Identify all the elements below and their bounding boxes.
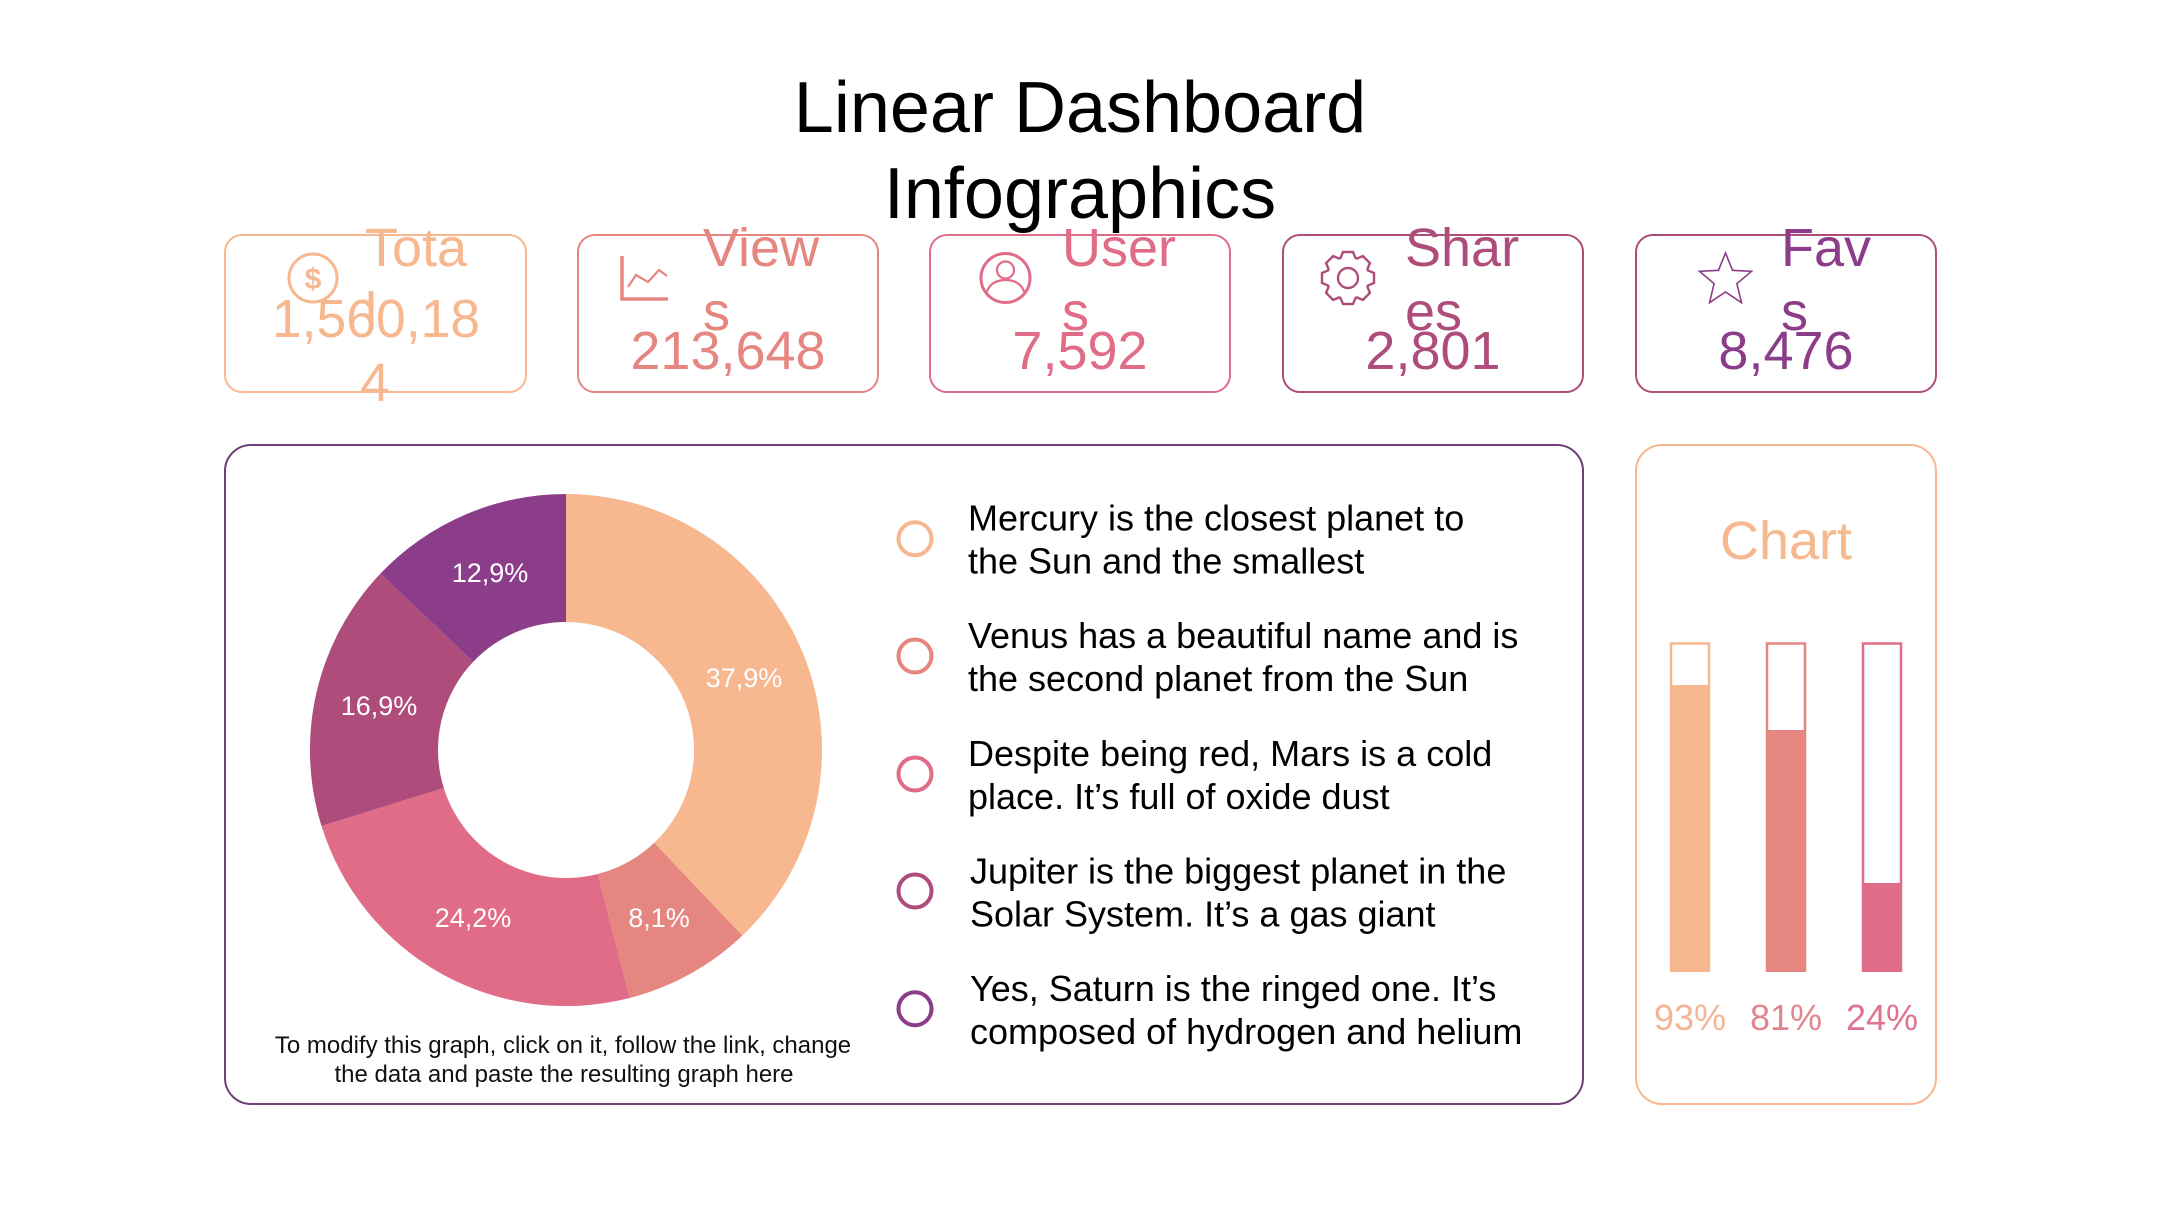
donut value labels: 37,9% <box>706 663 782 693</box>
bar: 93% <box>1654 644 1726 1038</box>
card label: views: s <box>703 282 730 342</box>
legend item: Mars: place. It’s full of oxide dust <box>968 776 1390 817</box>
card label: favs: s <box>1781 282 1808 342</box>
card value: favs: 8,476 <box>1718 321 1854 381</box>
legend item: Mercury: the Sun and the smallest <box>968 540 1364 582</box>
bar: 81% <box>1750 644 1822 1038</box>
card label: views <box>703 218 820 342</box>
panel: favs card <box>1636 218 1936 392</box>
panel: main donut and legend <box>225 445 1583 1104</box>
donut chart <box>310 494 822 1006</box>
panel: views card <box>578 218 878 392</box>
donut caption: To modify this graph, click on it, follow the link, change <box>275 1032 851 1059</box>
icon: dollar coin: $ <box>305 263 322 296</box>
legend item: Jupiter: Jupiter is the biggest planet in the <box>970 850 1506 892</box>
bar: 24% <box>1846 644 1918 1038</box>
legend item: Mercury: Mercury is the closest planet to <box>968 498 1464 538</box>
donut value labels: 8,1% <box>628 903 690 933</box>
donut caption <box>275 1032 851 1088</box>
icon: line chart <box>622 256 668 299</box>
donut value labels: 16,9% <box>341 691 417 721</box>
card label: favs <box>1781 218 1871 342</box>
legend item: Jupiter <box>898 850 1506 934</box>
bar: 81%: 81% <box>1750 997 1822 1038</box>
legend item: Saturn: composed of hydrogen and helium <box>970 1011 1522 1052</box>
icon: star <box>1700 253 1752 303</box>
donut value labels: 24,2% <box>435 903 511 933</box>
card label: total: l <box>365 282 377 342</box>
card value: views: 213,648 <box>630 321 826 381</box>
card value: total: 1,560,18 <box>272 290 480 349</box>
icon: gear <box>1322 252 1374 304</box>
card label: views: View <box>703 218 820 278</box>
bar: 24%: 24% <box>1846 997 1918 1038</box>
donut value labels: 12,9% <box>452 558 528 588</box>
card value: users: 7,592 <box>1012 321 1148 381</box>
legend item: Jupiter: Solar System. It’s a gas giant <box>970 894 1436 934</box>
donut value labels <box>341 558 782 933</box>
icon: user <box>981 254 1030 302</box>
card label: total <box>365 218 468 342</box>
bar: 93%: 93% <box>1654 997 1726 1038</box>
legend item: Saturn <box>898 968 1522 1052</box>
panel: users card <box>930 218 1230 392</box>
panel: bar chart <box>1636 445 1936 1104</box>
title: Linear Dashboard <box>794 68 1366 148</box>
card label: shares: Shar <box>1405 218 1519 278</box>
donut caption: the data and paste the resulting graph here <box>334 1061 794 1088</box>
card value: total <box>272 290 480 413</box>
card value: shares: 2,801 <box>1365 321 1501 381</box>
card label: users: s <box>1062 282 1089 342</box>
card value: total: 4 <box>360 354 390 413</box>
legend item: Mars <box>898 733 1492 817</box>
card label: users <box>1062 218 1176 342</box>
card label: shares <box>1405 218 1519 342</box>
title <box>794 68 1366 234</box>
bar chart heading: Chart <box>1720 511 1852 571</box>
legend item: Venus <box>898 615 1518 699</box>
card label: total: Tota <box>365 218 468 278</box>
legend item: Mercury <box>898 498 1464 582</box>
title: Infographics <box>884 154 1276 234</box>
card label: favs: Fav <box>1781 218 1871 278</box>
panel: total card <box>225 218 526 413</box>
legend item: Venus: the second planet from the Sun <box>968 658 1468 699</box>
legend item: Mars: Despite being red, Mars is a cold <box>968 733 1492 774</box>
icon: dollar coin <box>289 254 337 302</box>
panel: shares card <box>1283 218 1583 392</box>
legend item: Saturn: Yes, Saturn is the ringed one. It’s <box>970 968 1496 1009</box>
card label: users: User <box>1062 218 1176 278</box>
card label: shares: es <box>1405 282 1462 342</box>
legend item: Venus: Venus has a beautiful name and is <box>968 615 1518 656</box>
